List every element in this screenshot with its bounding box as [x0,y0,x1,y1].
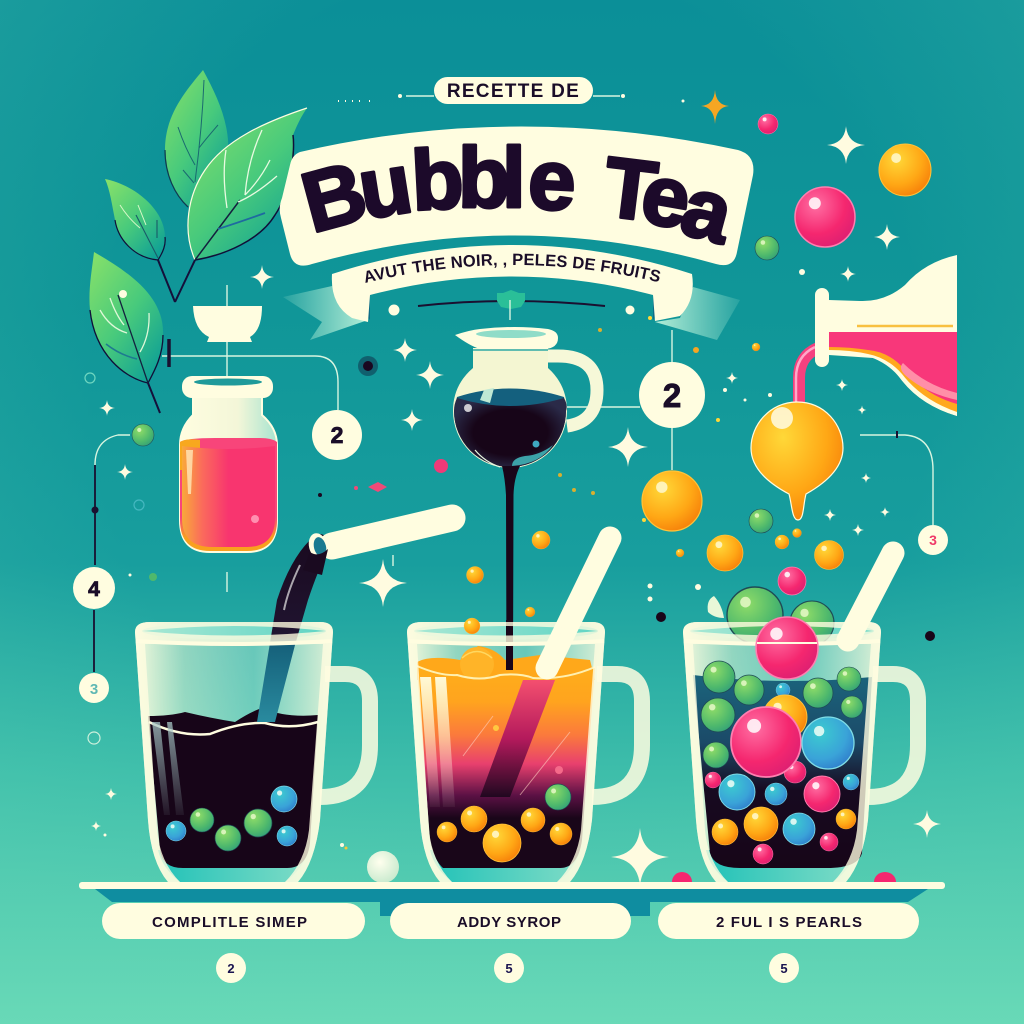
top pearls [727,587,783,643]
badge 2 large [639,362,705,428]
leaf stems [148,260,195,413]
heading pill: recette de: RECETTE DE [447,81,580,102]
step labels [102,903,919,983]
pour stream [502,466,520,670]
subtitle text: AVUT THE NOIR, , PELES DE FRUITS [365,254,660,283]
heading pill: recette de [338,77,684,104]
icon: orange star [701,90,729,124]
leaf right [188,108,307,260]
badge 3 left: 3 [90,681,98,698]
divider ornament [388,290,634,316]
pearls [703,661,735,693]
title text: Bubble Tea [292,131,743,263]
pitcher liquid [454,388,566,467]
leaf small left [105,179,165,260]
illustration: tea leaves [89,70,307,413]
cream highlight stripes [420,677,455,807]
badge 2 [312,410,362,460]
step number 2 [216,953,246,983]
panel: mug 2 [407,538,642,882]
straw and pour [257,534,328,722]
illustration: jar [180,376,277,552]
step number 5 [494,953,524,983]
jar liquid [180,438,277,551]
subtitle ribbon [332,245,693,322]
step number 5 third: 5 [780,961,788,976]
badge 2: 2 [331,422,343,448]
tray [79,872,945,916]
ribbon tails [283,286,740,340]
illustration: top right pitcher [751,255,957,520]
floating pearls [132,114,935,883]
badge 4: 4 [88,578,100,601]
step 2 label: ADDY SYROP [457,914,561,931]
black tea [148,708,318,868]
number badges [73,362,948,703]
step 3 label [658,903,919,939]
pour stream [506,620,513,670]
step 1 label: COMPLITLE SIMEP [152,914,307,931]
leaf lower [89,252,163,383]
straw [848,553,893,640]
jar neck and glass [180,396,277,552]
tea surface [149,722,318,734]
pitcher handle [548,356,597,426]
pearls [166,821,186,841]
title banner [280,126,753,266]
step 3 label: 2 FUL I S PEARLS [716,914,862,931]
pitcher body [453,348,567,468]
leaf top [165,70,228,207]
badge 2 large: 2 [663,377,681,414]
pink stream [799,348,818,405]
badge 3 right: 3 [929,532,937,548]
badge 4 [73,567,115,609]
syrup [829,332,957,416]
decorative sparkles and dots [85,126,941,886]
pink stripe [480,680,555,797]
foam [417,646,595,681]
illustration: funnel above jar [193,306,262,342]
pearls [437,822,457,842]
step number 2: 2 [227,961,235,976]
dark tea [693,675,872,868]
layered tea [417,667,595,868]
step number 5 third [769,953,799,983]
step number 5: 5 [505,961,513,976]
pitcher cream body [829,255,957,416]
big orange drop [751,402,843,520]
straw [547,538,610,668]
jar lid [182,376,273,398]
panel: mug 3 [683,553,918,882]
illustration: central pitcher [453,327,597,670]
step 1 label [102,903,365,939]
pitcher rim [455,327,558,349]
step 2 label [390,903,631,939]
panel: mug 1 [135,518,452,882]
badge 3 right [918,525,948,555]
badge 3 left [79,673,109,703]
connector lines [92,285,933,672]
